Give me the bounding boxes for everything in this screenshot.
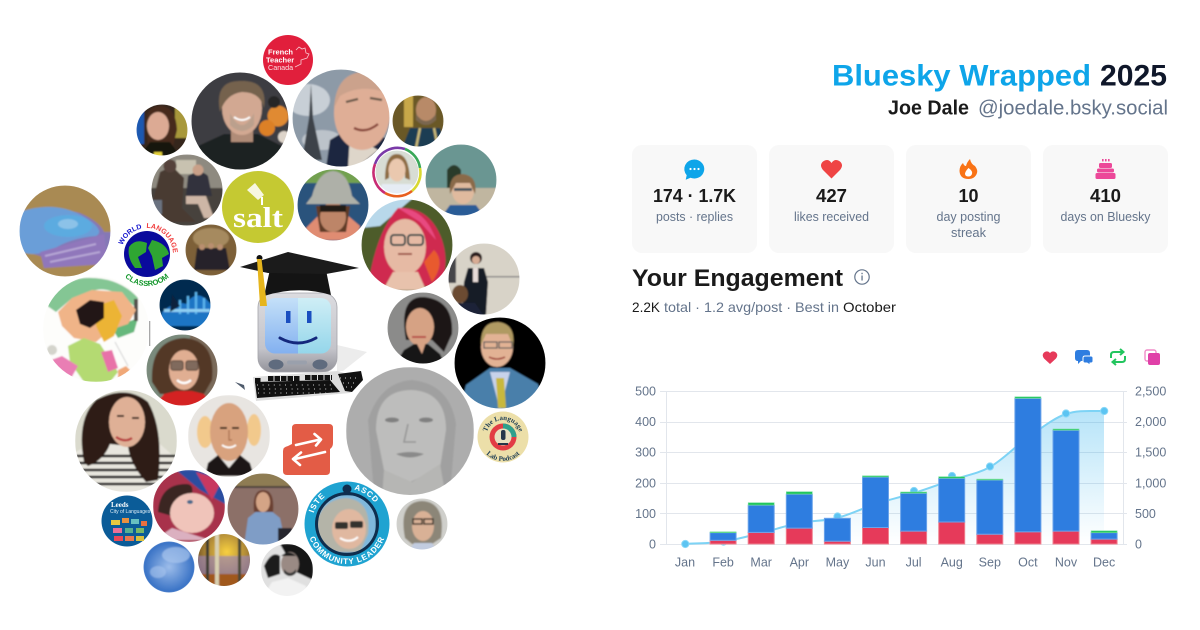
icon: info — [855, 270, 869, 284]
avatar: woman with grey curly hair — [396, 498, 448, 552]
display name: Joe Dale — [888, 98, 969, 120]
handle: @joedale.bsky.social — [978, 98, 1168, 120]
mouse — [235, 382, 245, 390]
avatar: man in blue suit — [454, 317, 546, 410]
cumulative area — [685, 411, 1104, 544]
cumulative line — [685, 411, 1104, 544]
avatar: small group photo — [185, 224, 237, 276]
card: days on Bluesky: 410 — [1090, 185, 1121, 206]
avatar: French Teacher Canada — [263, 35, 313, 85]
right axis labels: 1,000 — [1135, 476, 1166, 490]
left axis labels: 400 — [635, 415, 656, 429]
avatar: The Language Lab Podcast — [478, 412, 528, 462]
card: day posting streak: 10 — [958, 185, 978, 206]
monitor screen with smiling face — [265, 298, 331, 354]
avatar: ISTE ASCD community leader: COMMUNITY LEADER — [310, 536, 384, 564]
monitor speakers — [268, 360, 328, 370]
title: Bluesky Wrapped — [832, 60, 1091, 92]
avatar: black and white portrait — [261, 544, 313, 598]
avatar: World Language Classroom: WORLD — [118, 224, 142, 244]
left axis labels: 0 — [649, 538, 656, 552]
right axis labels: 2,000 — [1135, 415, 1166, 429]
avatar: pencil sketch portrait — [346, 367, 474, 498]
central mascot: computer with graduation cap — [235, 252, 367, 401]
monitor shadow — [337, 345, 367, 371]
stat cards — [632, 145, 1168, 253]
month labels: Jul — [906, 556, 922, 570]
avatar: woman at brick wall — [227, 473, 299, 546]
avatar: woman with glasses, top left — [136, 104, 188, 157]
avatar: woman with glasses in red top — [146, 334, 218, 406]
card: posts and replies — [632, 145, 757, 253]
avatar: Leeds City of Languages — [102, 496, 152, 546]
avatar: ISTE ASCD community leader: ASCD — [354, 484, 378, 502]
keyboard — [253, 371, 363, 401]
avatar: The Language Lab Podcast: Lab Podcast — [486, 450, 520, 461]
card: likes received: 427 — [816, 185, 847, 206]
engagement summary: October — [843, 299, 896, 315]
title year: 2025 — [1100, 60, 1167, 92]
avatar: blue audio waveform — [159, 279, 212, 331]
line points — [682, 407, 1108, 548]
heading: Your Engagement: Your Engagement — [632, 265, 843, 292]
chart legend icons — [1043, 349, 1160, 365]
icon: birthday cake — [1096, 159, 1116, 179]
icon: heart — [821, 160, 842, 178]
month labels: Sep — [979, 556, 1001, 570]
avatar: blue abstract image — [143, 541, 195, 593]
engagement summary: 2.2K — [632, 299, 661, 315]
red arrows logo — [283, 424, 333, 475]
card: days on Bluesky — [1043, 145, 1168, 253]
title block — [832, 60, 1168, 120]
avatar cluster — [20, 35, 546, 596]
avatar: man with colourful background — [153, 470, 225, 542]
left axis labels: 300 — [635, 446, 656, 460]
card: days on Bluesky: days on Bluesky — [1060, 209, 1151, 224]
avatar: woman with dark curly hair — [387, 292, 459, 366]
avatar: French Teacher Canada: French — [268, 48, 293, 56]
card: posts and replies: 174 · 1.7K — [653, 185, 737, 206]
month labels: Jun — [865, 556, 886, 570]
avatar: woman with pink hair — [361, 199, 453, 291]
avatar: woman with teal gate — [425, 144, 497, 216]
avatar: woman at whiteboard — [448, 243, 522, 316]
avatar: man with orange balloons — [192, 72, 288, 170]
month labels: Dec — [1093, 556, 1115, 570]
card: day posting streak: day posting — [936, 209, 1000, 224]
month labels: Mar — [750, 556, 772, 570]
avatar: woman with rainbow ring — [373, 148, 421, 196]
left axis labels — [635, 384, 656, 552]
card: day posting streak — [906, 145, 1031, 253]
avatar: ISTE ASCD community leader: ISTE — [308, 492, 325, 513]
month labels: Oct — [1018, 556, 1038, 570]
avatar: Leeds City of Languages: City of Languages — [110, 509, 151, 515]
avatar: golden forest painting — [197, 533, 251, 587]
chart: monthly engagement — [635, 384, 1166, 570]
avatar: salt logo: salt — [233, 202, 283, 234]
engagement summary — [632, 299, 896, 315]
avatar: The Language Lab Podcast: The Language — [482, 416, 522, 432]
legend: quotes — [1145, 350, 1160, 365]
avatar: French Teacher Canada: Teacher — [266, 56, 294, 64]
card: posts and replies: posts · replies — [656, 209, 733, 224]
card: likes received — [769, 145, 894, 253]
avatar: blue and purple silk swirl — [18, 185, 111, 277]
avatar: ISTE ASCD community leader — [304, 482, 390, 566]
card: day posting streak: streak — [951, 225, 986, 240]
grid — [660, 391, 1127, 544]
avatar: World Language Classroom — [118, 223, 178, 286]
card: likes received: likes received — [794, 209, 869, 224]
engagement summary: total · 1.2 avg/post · Best in — [664, 299, 839, 315]
avatar: statue and woman on bench — [150, 154, 224, 226]
stacked bars — [710, 397, 1117, 544]
avatar: woman in sun hat — [297, 169, 369, 241]
left axis labels: 200 — [635, 476, 656, 490]
right axis labels: 2,500 — [1135, 384, 1166, 398]
legend: likes — [1043, 351, 1057, 364]
right axis labels — [1135, 384, 1166, 552]
month labels: Aug — [941, 556, 963, 570]
month labels: Nov — [1055, 556, 1078, 570]
avatar: World Language Classroom: CLASSROOM — [126, 274, 169, 286]
right axis labels: 500 — [1135, 507, 1156, 521]
avatar: painted portrait of bald man — [188, 395, 270, 477]
left axis labels: 100 — [635, 507, 656, 521]
month labels: May — [826, 556, 850, 570]
avatar: bearded man with saxophone — [392, 95, 446, 148]
monitor body — [258, 293, 337, 372]
icon: chat bubble — [684, 159, 704, 180]
avatar: World Language Classroom: LANGUAGE — [146, 223, 178, 253]
graduation cap — [240, 252, 359, 306]
month labels: Feb — [712, 556, 734, 570]
month labels: Apr — [790, 556, 809, 570]
avatar: sunflower illustration — [43, 276, 150, 382]
legend: reposts — [1111, 349, 1125, 365]
avatar: man with Eiffel Tower — [292, 70, 390, 166]
month labels — [675, 556, 1115, 570]
left axis labels: 500 — [635, 384, 656, 398]
right axis labels: 0 — [1135, 538, 1142, 552]
legend: replies — [1075, 350, 1093, 365]
right axis labels: 1,500 — [1135, 446, 1166, 460]
avatar: salt logo — [222, 171, 294, 243]
avatar: French Teacher Canada: Canada — [268, 63, 293, 72]
avatar: woman with long curly hair and stripes — [75, 390, 178, 492]
icon: flame — [960, 159, 977, 179]
month labels: Jan — [675, 556, 695, 570]
avatar: Leeds City of Languages: Leeds — [111, 501, 129, 509]
